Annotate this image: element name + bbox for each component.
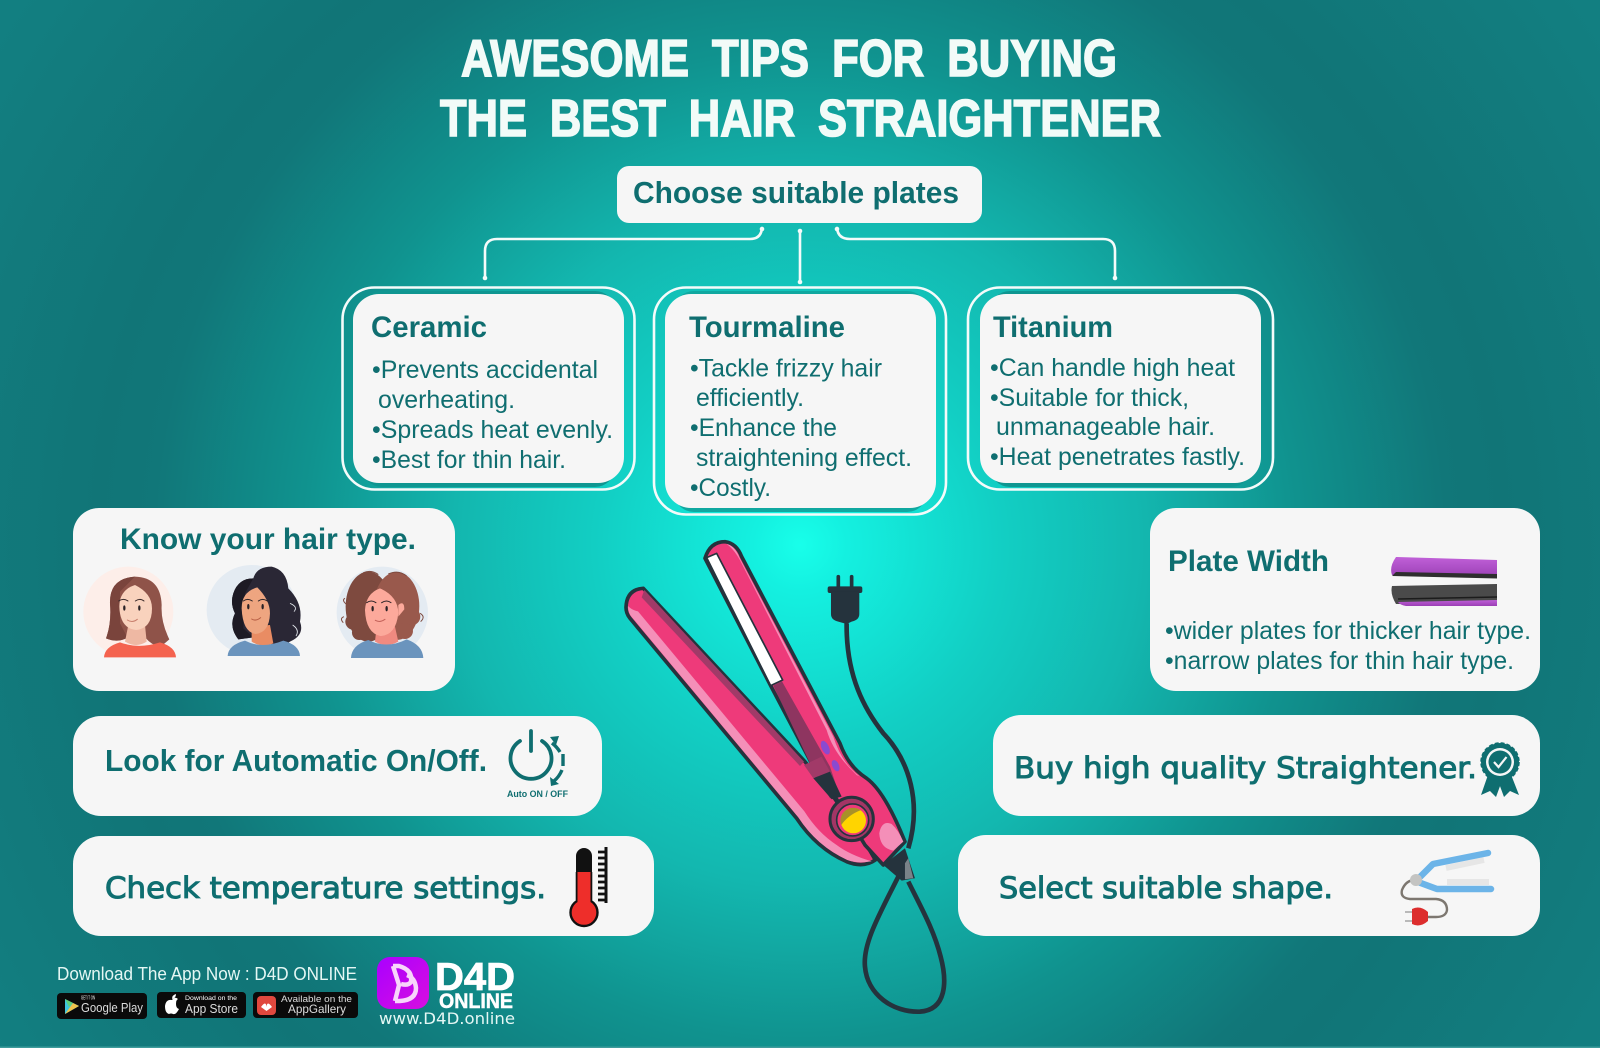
heading: ceramic: Ceramic [371,311,487,344]
icon: thermometer [570,847,606,926]
badge: google play: GET IT ON [81,996,95,1002]
cord neck [883,848,915,881]
logo: d4d online: www.D4D.online [379,1009,515,1028]
connector arrows [483,227,1117,284]
panel: ceramic [342,288,634,490]
icon: quality badge [1481,743,1519,797]
panel: temperature settings [73,836,654,936]
text: select suitable shape: Select suitable shape. [999,871,1333,905]
badge: app store: App Store [185,1001,238,1016]
panel: know your hair type [73,508,455,691]
text: tourmaline points: efficiently. [696,384,804,412]
heading: plate width: Plate Width [1168,545,1329,578]
logo: d4d online: D4D [435,956,515,999]
text: ceramic points: •Best for thin hair. [372,446,566,474]
icon: woman with wavy hair [207,565,301,656]
badge: google play [57,993,147,1019]
title [440,30,1161,148]
footer: download the app [57,964,358,1019]
panel: automatic on/off [73,716,602,816]
panel: titanium [968,288,1273,490]
text: tourmaline points: •Enhance the [690,414,837,442]
heading: know your hair type: Know your hair type. [120,523,416,556]
text: titanium points: •Suitable for thick, [990,384,1189,412]
logo: d4d online: ONLINE [439,990,513,1013]
badge: google play: Google Play [81,1000,143,1015]
text: titanium points: •Can handle high heat [990,354,1235,382]
text: titanium points: •Heat penetrates fastly. [990,443,1245,471]
text: buy high quality straightener: Buy high quality Straightener. [1014,751,1477,785]
text: download line: Download The App Now : D4D ONLINE [57,964,357,984]
badge: app store [157,992,246,1018]
badge: appgallery: Available on the [281,994,352,1004]
text: ceramic points [372,356,613,474]
text: ceramic points: •Spreads heat evenly. [372,416,613,444]
icon: blue straightener with plug [1402,853,1491,925]
badge: app store: Download on the [185,996,238,1002]
panel: plate width [1150,508,1540,691]
icon: woman with curly hair [337,567,428,658]
illustration: pink hair straightener [626,542,944,1012]
lower arm [626,588,875,865]
text: plate width points: •wider plates for thicker hair type. [1165,617,1531,645]
text: ceramic points: overheating. [378,386,515,414]
badge: appgallery: AppGallery [288,1002,346,1016]
text: tourmaline points: •Tackle frizzy hair [690,354,882,382]
text: tourmaline points: straightening effect. [696,444,912,472]
text: titanium points [990,354,1245,471]
panel: high quality [993,715,1540,816]
icon: woman with straight hair [83,567,176,657]
icon: power auto on off [507,731,568,800]
heading: tourmaline: Tourmaline [689,311,845,344]
icon: purple flat plates [1391,557,1497,606]
panel: tourmaline [654,288,946,514]
text: plate width points: •narrow plates for thin hair type. [1165,647,1514,675]
text: ceramic points: •Prevents accidental [372,356,598,384]
title: AWESOME TIPS FOR BUYING [461,30,1117,88]
text: titanium points: unmanageable hair. [996,413,1215,441]
upper arm with plate [705,542,905,865]
title: THE BEST HAIR STRAIGHTENER [440,90,1161,148]
icon: power auto on off: Auto ON / OFF [507,789,568,800]
text: look for automatic on/off: Look for Automatic On/Off. [105,743,487,778]
text: plate width points [1165,617,1531,675]
badge: appgallery [253,992,358,1018]
hinge dial [830,797,873,841]
text: tourmaline points: •Costly. [690,474,771,502]
panel: choose suitable plates heading [617,166,982,223]
panel: suitable shape [958,835,1540,936]
heading: titanium: Titanium [993,311,1113,344]
panel: choose suitable plates heading: Choose suitable plates [633,175,959,210]
logo: d4d online [377,956,515,1028]
text: tourmaline points [690,354,912,502]
cable and plug [828,577,944,1012]
text: check temperature settings: Check temperature settings. [105,871,546,905]
